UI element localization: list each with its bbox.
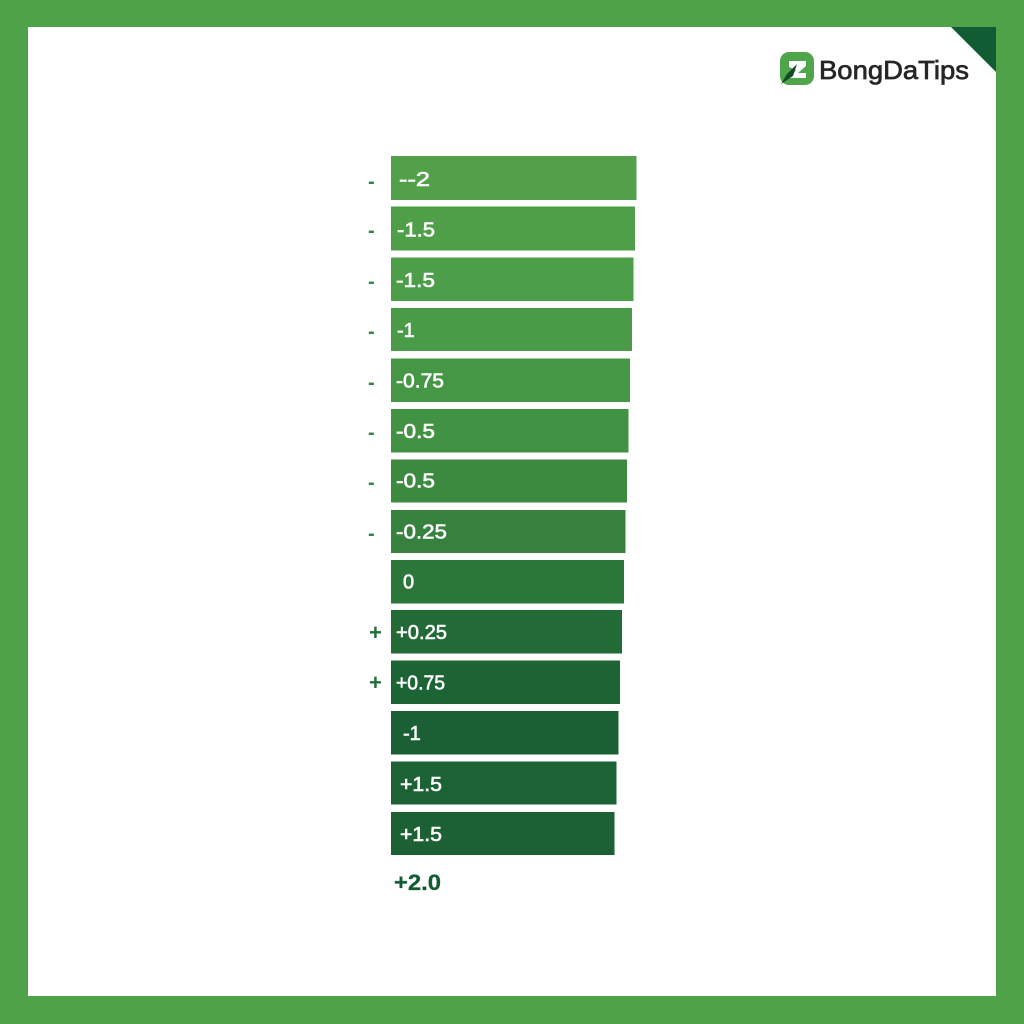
row: -0.25: - <box>368 523 375 545</box>
row: -0.5 second <box>368 460 627 502</box>
row: 0: 0 <box>403 572 414 594</box>
row: -0.25: -0.25 <box>396 522 447 544</box>
row: -1.5 <box>368 206 635 250</box>
row: --2 <box>368 156 636 200</box>
row: -1.5 second <box>368 258 634 301</box>
row: -1: -1 <box>397 320 415 342</box>
row: -1 <box>368 308 632 351</box>
row: -1 lower <box>391 711 618 754</box>
row: -0.5 <box>368 409 628 452</box>
label: +2.0: +2.0 <box>394 870 441 895</box>
row: +1.5 second <box>391 812 614 855</box>
logo: BongDaTips <box>780 52 969 85</box>
handicap scale chart <box>368 156 636 895</box>
row: -0.75: -0.75 <box>396 370 444 392</box>
row: +1.5 second: +1.5 <box>400 824 442 846</box>
row: -1.5: - <box>368 220 375 242</box>
row: -1 lower: -1 <box>403 723 421 745</box>
row: -0.5: -0.5 <box>396 421 435 443</box>
row: -0.75: - <box>368 372 375 394</box>
row: -0.5 second: - <box>368 472 375 494</box>
row: -0.5 second: -0.5 <box>396 470 435 492</box>
corner triangle <box>951 27 996 72</box>
row: +1.5 <box>391 762 616 804</box>
row: -1.5: -1.5 <box>397 220 435 242</box>
row: -1: - <box>368 321 375 343</box>
row: -1.5 second: -1.5 <box>396 270 435 292</box>
row: +1.5: +1.5 <box>400 774 442 796</box>
row: +0.25 <box>369 610 622 654</box>
row: +0.25: +0.25 <box>396 622 447 644</box>
row: -0.5: - <box>368 422 375 444</box>
row: -1.5 second: - <box>368 271 375 293</box>
logo wordmark: BongDaTips <box>819 55 969 85</box>
row: +0.75 <box>369 660 620 704</box>
row: +0.75: + <box>369 670 382 695</box>
row: +0.75: +0.75 <box>396 672 445 694</box>
row: +0.25: + <box>369 620 382 645</box>
row: -0.75 <box>368 358 630 402</box>
row: -0.25 <box>368 510 626 553</box>
row: 0 <box>391 560 624 604</box>
row: --2: - <box>368 171 375 193</box>
row: --2: --2 <box>399 169 430 191</box>
icon: logo badge <box>780 52 814 85</box>
